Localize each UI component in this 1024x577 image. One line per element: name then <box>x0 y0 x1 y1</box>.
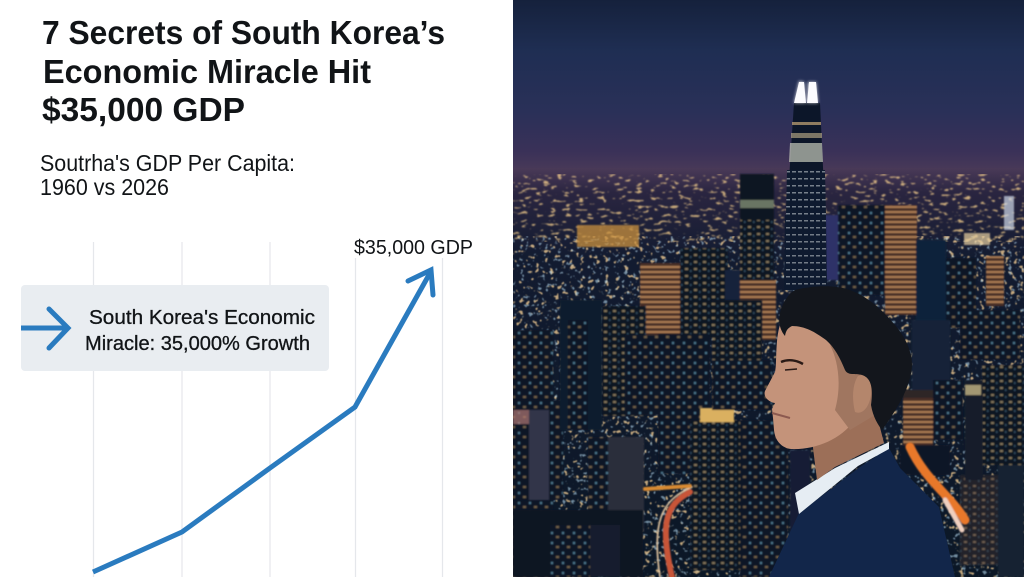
city base and distant lights <box>513 168 1024 577</box>
shirt collar <box>795 442 889 514</box>
suit jacket <box>769 448 955 577</box>
callout text <box>85 307 315 355</box>
title: Economic Miracle Hit <box>43 53 371 90</box>
callout: 35,000% growth <box>21 285 329 371</box>
highway light trails <box>645 447 965 577</box>
ear <box>853 375 871 413</box>
face <box>764 325 848 450</box>
chart value label: $35,000 GDP <box>354 237 473 259</box>
left panel background <box>0 0 512 577</box>
subtitle <box>40 150 295 200</box>
callout text: Miracle: 35,000% Growth <box>85 333 310 355</box>
title: 7 Secrets of South Korea’s <box>42 14 445 51</box>
icon: callout arrow <box>21 309 68 348</box>
callout text: South Korea's Economic <box>89 307 315 329</box>
man in suit, profile <box>765 286 955 577</box>
growth arrow line <box>93 270 433 572</box>
neck <box>812 412 884 480</box>
central skyscraper <box>784 81 827 290</box>
mid-distance buildings <box>513 174 1014 577</box>
title <box>42 14 445 128</box>
foreground buildings <box>513 300 1024 577</box>
subtitle: 1960 vs 2026 <box>40 174 169 200</box>
title: $35,000 GDP <box>42 91 245 128</box>
chart grid lines <box>94 242 442 577</box>
hair <box>779 286 912 430</box>
chart: GDP growth line <box>93 237 473 577</box>
panel: night city photo <box>513 0 1024 577</box>
night sky <box>513 0 1024 172</box>
tower crown lights <box>794 81 818 103</box>
subtitle: Soutrha's GDP Per Capita: <box>40 150 295 176</box>
lips <box>772 413 790 418</box>
eye and brow <box>781 360 803 370</box>
